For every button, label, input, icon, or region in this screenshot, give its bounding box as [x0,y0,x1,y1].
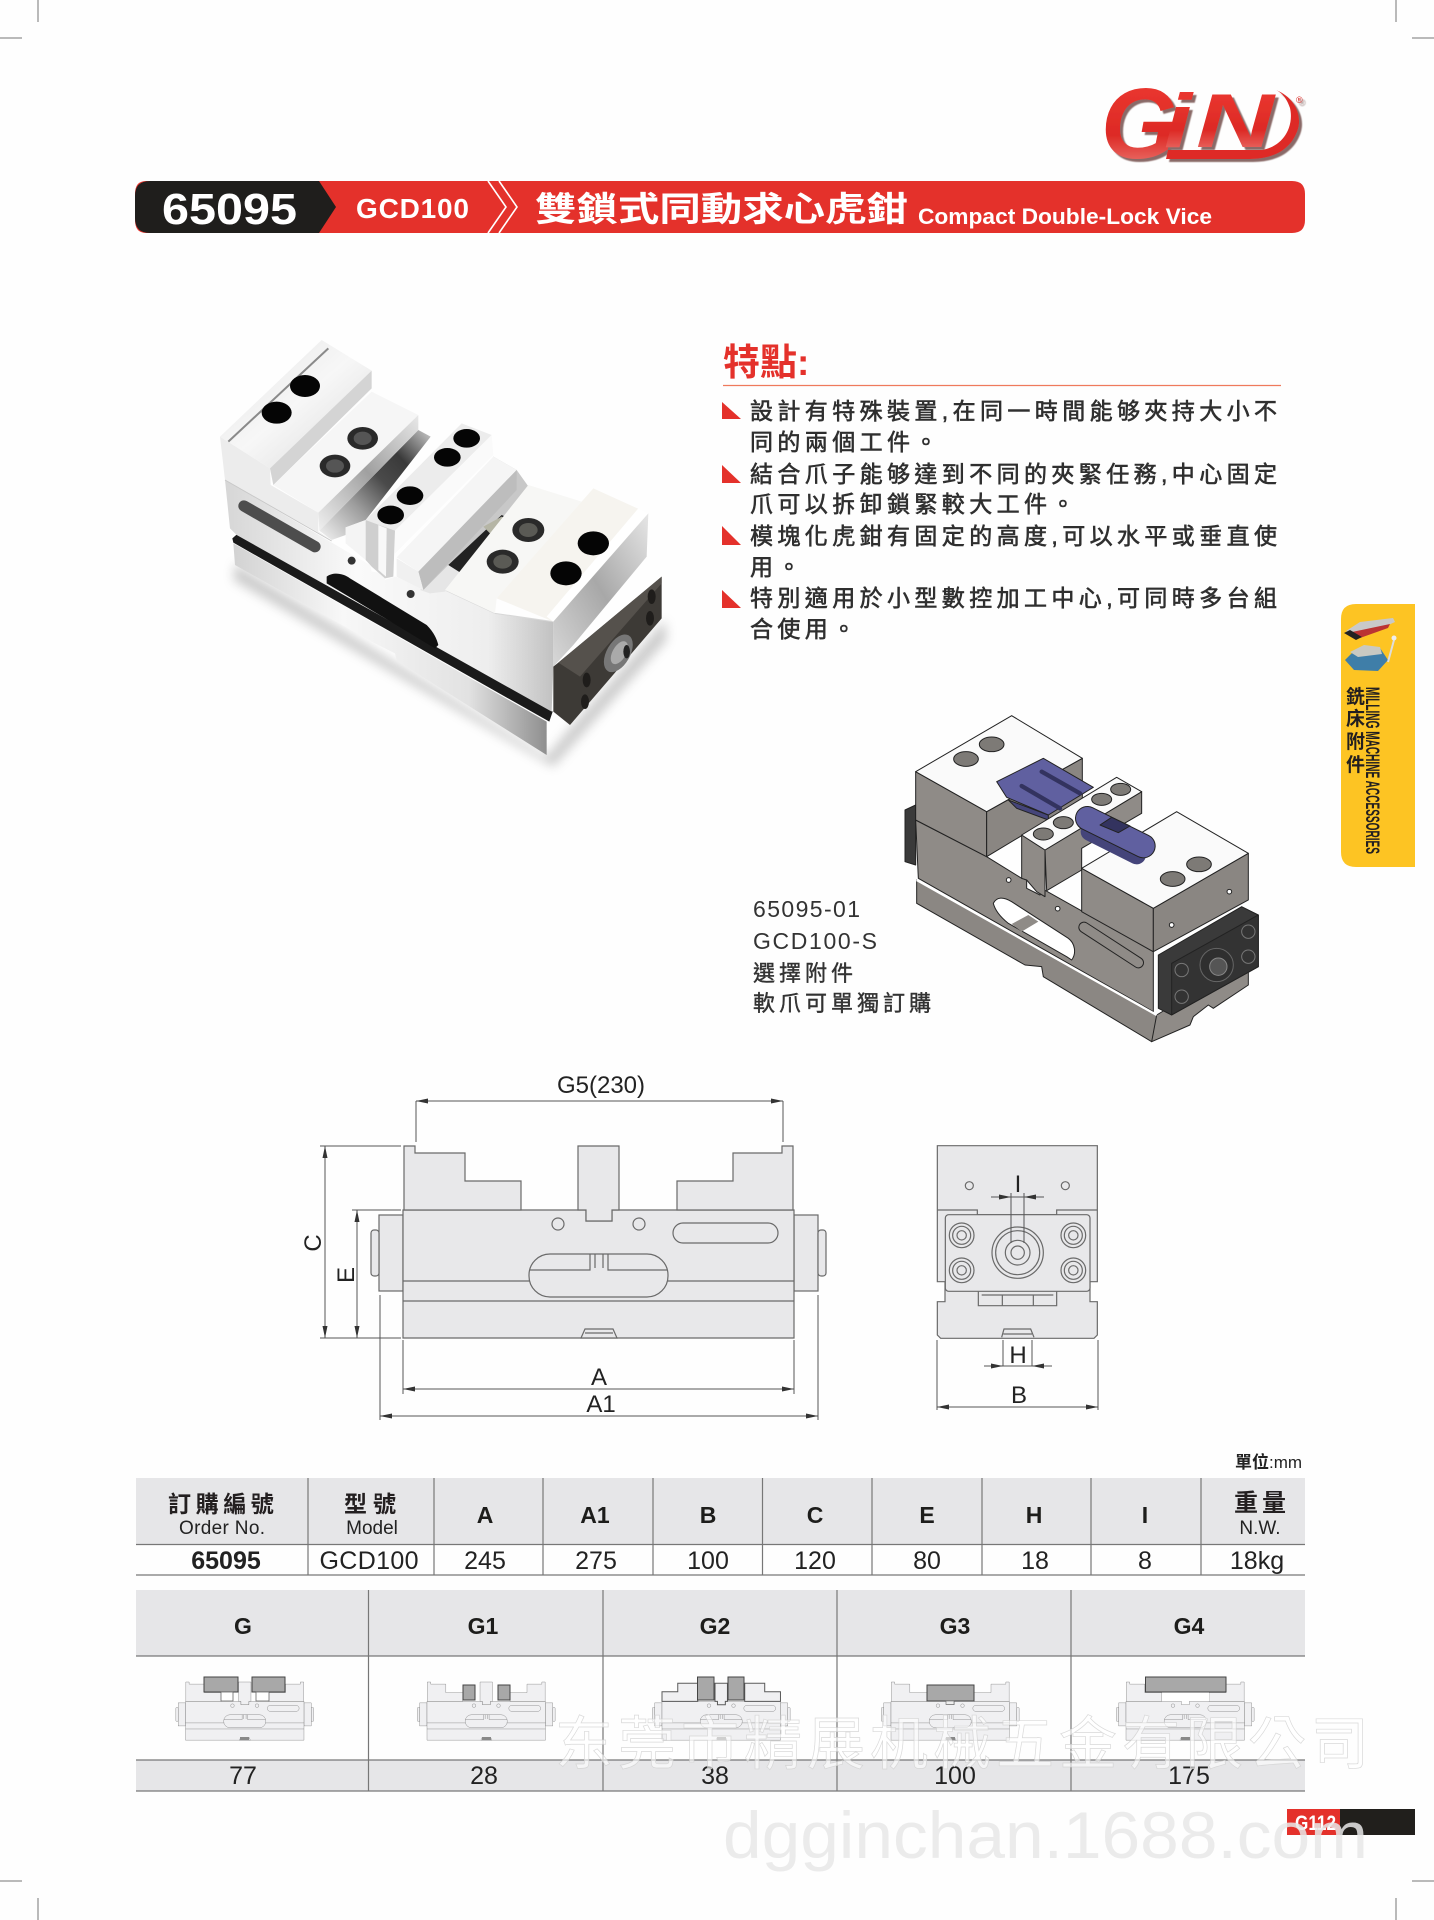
dimension B: B [1011,1382,1027,1409]
dimension G5 [416,1072,783,1142]
table header row: Model [346,1518,398,1539]
purple soft jaw 1 [1008,800,1048,820]
right end plate [1158,907,1258,1015]
table header row: I [1142,1502,1148,1528]
thumbnail G [176,1677,314,1740]
english title: Compact Double-Lock Vice [918,204,1212,229]
dimension A: A [591,1364,607,1391]
capacity values: 28 [470,1762,498,1790]
sidebar english label: MILLING MACHINE ACCESSORIES [1361,687,1382,854]
capacity values: 38 [701,1762,729,1790]
right block [1082,868,1153,952]
table header row: N.W. [1239,1518,1281,1539]
logo: GIN brand [1101,68,1303,180]
sidebar chinese label: 床 [1346,707,1365,730]
table data row [191,1547,1284,1575]
bullet 1 [722,398,1281,457]
bullet 1: 設計有特殊裝置,在同一時間能够夾持大小不 [750,398,1281,424]
thumbnail G4 [1116,1677,1254,1740]
table data row: 275 [575,1547,617,1575]
body plate [916,820,1153,1012]
accessory label [753,896,935,1016]
watermark: company name: 东莞市精展机械五金有限公司 [555,1697,1374,1781]
center jaw [1045,792,1142,891]
base [917,880,1157,1042]
capacity labels: G4 [1174,1613,1205,1639]
bullet 1: 同的兩個工件。 [750,423,942,457]
logo: GIN brand: N [1196,79,1277,164]
specification table [136,1478,1305,1575]
table data row: 65095 [191,1547,261,1575]
base block [233,543,547,755]
left end plate [905,805,916,865]
dimension E: E [333,1267,360,1283]
thumbnail G2 [652,1677,790,1740]
table data row: GCD100 [320,1547,418,1575]
bullet 3: 模塊化虎鉗有固定的高度,可以水平或垂直使 [750,523,1281,549]
bullet 4: 特別適用於小型數控加工中心,可同時多台組 [750,585,1281,611]
model: GCD100 [356,193,469,224]
side view vice [937,1146,1097,1338]
left block [916,772,987,857]
table data row: 245 [464,1547,506,1575]
capacity labels: G [234,1613,252,1639]
accessory label: GCD100-S [753,928,877,954]
accessory label: 65095-01 [753,896,860,922]
table header row: C [807,1502,823,1528]
capacity values: 100 [934,1762,976,1790]
bullet 3 [722,523,1281,582]
page number tag: G112 [1295,1812,1336,1835]
sidebar tab: milling machine accessories [1341,604,1415,867]
black order number tab [135,181,336,233]
product photo: vice [220,340,667,767]
watermark: url: dgginchan.1688.com [723,1798,1368,1872]
table data row: 8 [1138,1547,1152,1575]
table header row: 型號 [344,1491,402,1517]
capacity labels: G1 [468,1613,499,1639]
table data row: 80 [913,1547,941,1575]
dimension G5: G5(230) [557,1072,645,1099]
capacity labels: G2 [700,1613,730,1639]
side view technical drawing [937,1146,1098,1410]
table header row: H [1026,1502,1042,1528]
table data row: 100 [687,1547,729,1575]
dimension H [984,1340,1052,1369]
bullet 2: 爪可以拆卸鎖緊較大工件。 [750,485,1079,519]
table header row: B [700,1502,716,1528]
dimension B [937,1340,1098,1410]
logo: GIN brand: i [1164,79,1194,164]
bullet 4: 合使用。 [750,610,860,644]
dimension C: C [300,1234,327,1252]
sidebar chinese label: 附 [1346,731,1365,753]
purple soft jaw 2 [1090,832,1137,855]
dimension A1 [380,1295,818,1420]
jaw capacity table [136,1590,1305,1791]
bullet 2 [722,461,1281,519]
table data row: 18 [1021,1547,1049,1575]
chevrons [488,181,517,233]
table header row: Order No. [179,1518,265,1539]
inner mechanism [420,565,467,593]
dimension E [333,1210,401,1338]
dimension H: H [1009,1342,1027,1369]
front view technical drawing [300,1072,826,1420]
unit note: 單位:mm [1235,1452,1302,1472]
page number tag [1287,1809,1415,1835]
icon: small vice bottom [1345,636,1396,671]
capacity labels: G3 [940,1613,970,1639]
table header row: A [477,1502,493,1528]
logo: GIN brand: G [1101,68,1177,180]
table header row: A1 [580,1502,610,1528]
bullet 3: 用。 [750,548,805,582]
icon: small vice top [1344,618,1395,640]
thumbnail G3 [881,1682,1019,1740]
bullet 2: 結合爪子能够達到不同的夾緊任務,中心固定 [750,461,1281,487]
capacity values: 175 [1168,1762,1210,1790]
table header row: 重量 [1234,1490,1290,1517]
end plate [553,577,662,725]
front view vice body [371,1146,826,1338]
sidebar chinese label: 銑 [1346,685,1365,708]
features heading: 特點: [723,342,809,383]
chinese title: 雙鎖式同動求心虎鉗 [535,191,908,229]
dimension C [300,1146,401,1338]
sidebar chinese label [1346,685,1365,776]
table header row: 訂購編號 [168,1491,278,1517]
dimension I [991,1171,1044,1243]
accessory label: 軟爪可單獨訂購 [753,991,935,1016]
center jaw [366,423,492,531]
center jaw step [397,457,517,572]
table data row: 18kg [1230,1547,1284,1575]
capacity values [229,1762,1210,1790]
dimension A [403,1340,794,1394]
table data row: 120 [794,1547,836,1575]
logo: GIN brand: ® [1296,95,1303,105]
capacity labels [234,1613,1205,1639]
thumbnail G1 [417,1682,555,1740]
CAD drawing with soft jaws [905,716,1258,1042]
order number: 65095 [162,185,297,234]
sidebar chinese label: 件 [1346,754,1365,776]
dimension I: I [1015,1171,1021,1198]
accessory label: 選擇附件 [753,961,857,986]
title banner [135,181,1305,234]
right jaw [445,485,582,613]
capacity values: 77 [229,1762,257,1790]
body plate [225,480,553,712]
left jaw [220,437,332,540]
features panel [722,342,1281,644]
dimension A1: A1 [586,1391,616,1418]
table header row: E [919,1502,935,1528]
bullet 4 [722,585,1281,644]
table header row [168,1490,1290,1539]
